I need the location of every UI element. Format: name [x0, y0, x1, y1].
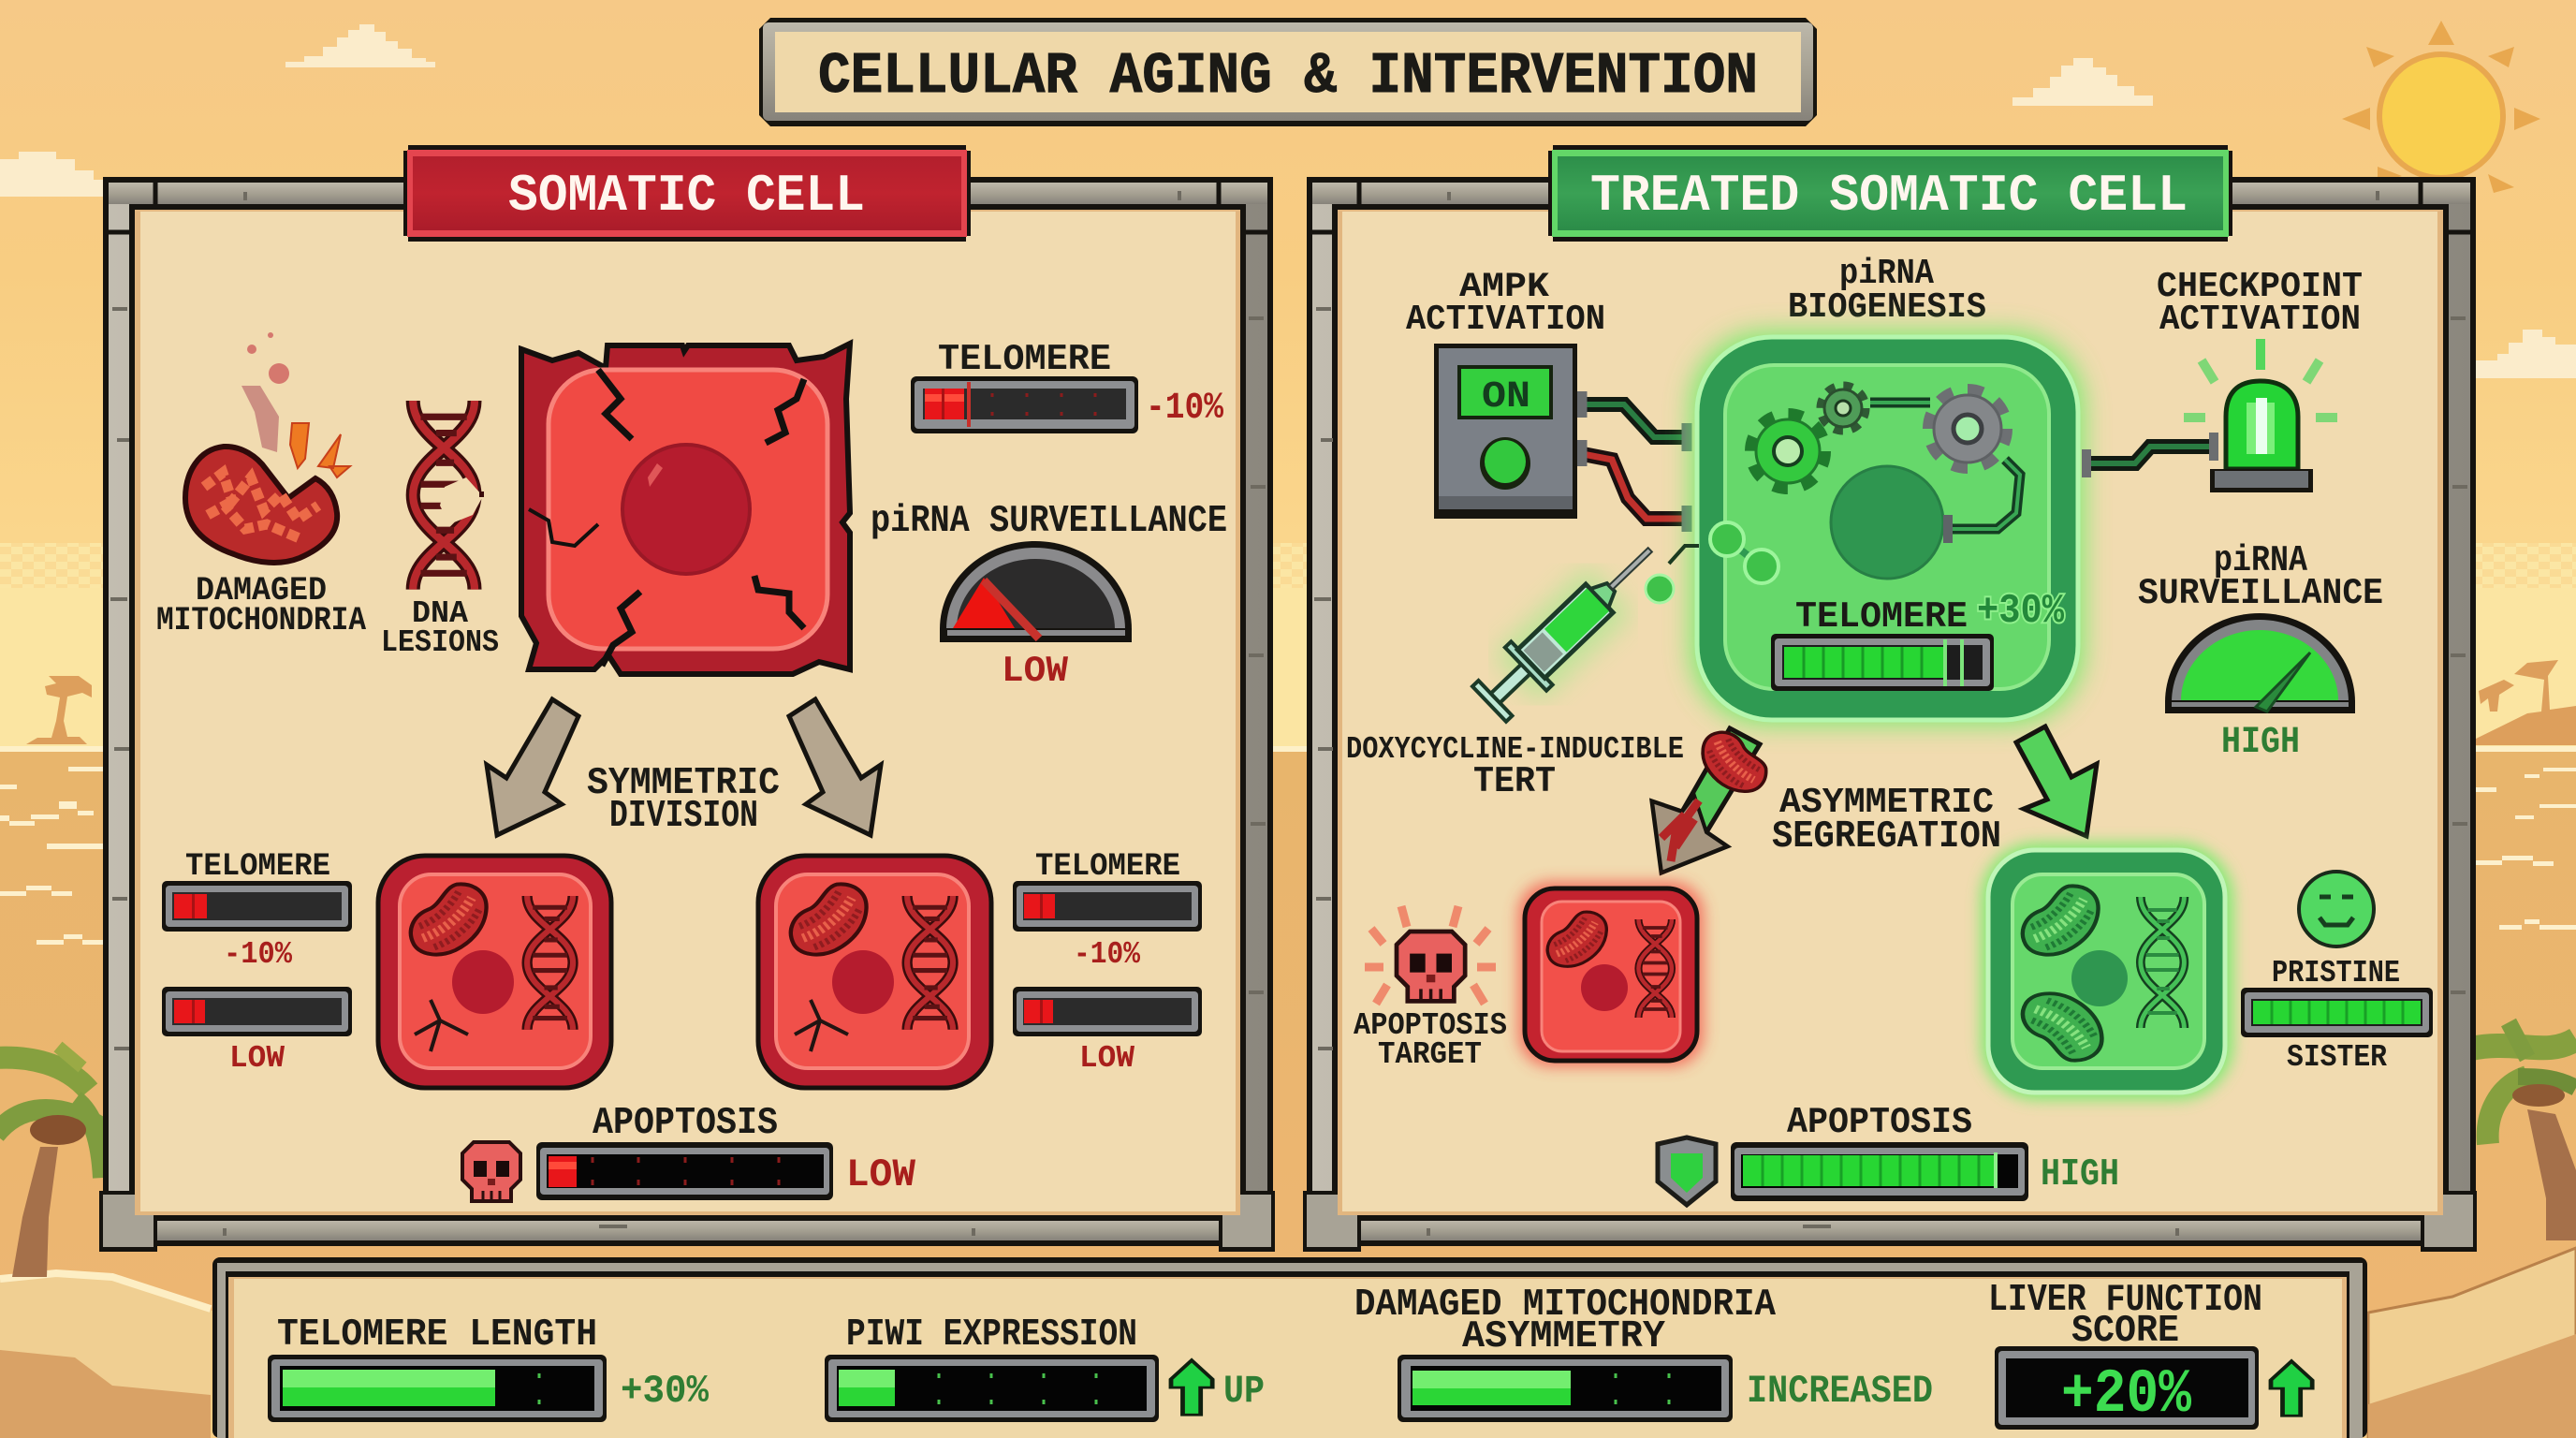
spray dashes	[1669, 546, 1699, 564]
metric: damaged mitochondria asymmetry	[1354, 1284, 1933, 1422]
darker sand left	[0, 1350, 211, 1438]
icon: skull	[462, 1142, 520, 1201]
left daughter stats: LOW	[229, 1041, 285, 1076]
header: treated somatic cell: TREATED SOMATIC CELL	[1590, 166, 2188, 226]
metric: telomere length: TELOMERE LENGTH	[277, 1313, 597, 1357]
icon: skull target with rays	[1365, 906, 1496, 1004]
panel frame	[1303, 177, 2477, 1252]
pristine bar	[2241, 988, 2433, 1037]
header: somatic cell	[403, 145, 971, 242]
label: damaged mitochondria	[156, 572, 366, 639]
label: DNA lesions	[381, 596, 499, 660]
label: damaged mitochondria: MITOCHONDRIA	[156, 602, 366, 639]
arrow: left daughter	[487, 699, 578, 835]
telomere minus 10 percent: -10%	[1146, 388, 1224, 430]
syringe glow	[1516, 590, 1610, 679]
telomere label in cell: TELOMERE	[1795, 596, 1968, 638]
treated cell glow	[1690, 331, 2084, 725]
label: low: LOW	[1002, 651, 1069, 692]
label: AMPK activation: ACTIVATION	[1406, 300, 1605, 340]
label: checkpoint activation: ACTIVATION	[2159, 300, 2361, 340]
label: apoptosis target: APOPTOSIS	[1354, 1008, 1507, 1043]
label: apoptosis target	[1354, 1008, 1507, 1072]
right daughter stats: -10%	[1074, 937, 1140, 972]
wires: switch to cell	[1582, 391, 1688, 532]
icon: AMPK on switch: ON	[1482, 376, 1530, 418]
gauge: piRNA surveillance high	[2165, 613, 2355, 713]
label: piRNA biogenesis	[1788, 254, 1986, 328]
gear: small	[1822, 388, 1864, 429]
left daughter cell	[378, 856, 611, 1088]
header: somatic cell: SOMATIC CELL	[508, 166, 865, 226]
label: symmetric division: SYMMETRIC	[587, 762, 780, 805]
apoptosis bar low	[536, 1142, 833, 1200]
label: symmetric division: DIVISION	[609, 795, 758, 838]
nucleus	[1831, 466, 1943, 579]
wire to beacon	[2086, 433, 2214, 477]
right daughter cell	[758, 856, 991, 1088]
nucleus	[622, 445, 750, 574]
metric: liver function score: LIVER FUNCTION	[1988, 1279, 2262, 1322]
apoptosis bar high	[1731, 1142, 2028, 1201]
label: piRNA surveillance	[2138, 540, 2383, 614]
label: apoptosis high: HIGH	[2041, 1153, 2119, 1196]
gear: green	[1754, 418, 1822, 485]
label: DNA lesions: DNA	[412, 596, 468, 631]
metric: liver function score: +20%	[2061, 1359, 2191, 1430]
metric: damaged mitochondria asymmetry: ASYMMETRY	[1462, 1315, 1665, 1358]
cloud 1	[285, 24, 435, 67]
telomere bar in cell	[1771, 634, 1994, 691]
apoptotic daughter cell	[1525, 888, 1697, 1061]
label: sister: SISTER	[2287, 1040, 2387, 1075]
panel: treated somatic cell	[1303, 145, 2477, 1252]
right island with palms	[2474, 660, 2576, 745]
label: asymmetric segregation: ASYMMETRIC	[1779, 783, 1994, 823]
pristine daughter cell	[1988, 850, 2225, 1093]
panel frame	[99, 177, 1275, 1252]
red cell glow	[1518, 882, 1704, 1066]
label: apoptosis: APOPTOSIS	[593, 1102, 778, 1145]
label: piRNA surveillance: SURVEILLANCE	[2138, 573, 2383, 614]
molecules	[1710, 522, 1778, 583]
left island with palm	[26, 676, 92, 744]
label: doxycycline-inducible TERT	[1346, 732, 1684, 802]
icon: damaged mitochondrion	[185, 332, 350, 563]
label: symmetric division	[587, 762, 780, 838]
label: AMPK activation	[1406, 268, 1605, 340]
icon: syringe	[1469, 528, 1671, 726]
label: damaged mitochondria: DAMAGED	[196, 572, 327, 609]
left daughter stats: TELOMERE	[185, 849, 330, 885]
sun	[2342, 21, 2540, 193]
left palm tree	[0, 1047, 103, 1277]
label: piRNA surveillance: piRNA SURVEILLANCE	[871, 500, 1227, 543]
metric: piwi expression: PIWI EXPRESSION	[846, 1313, 1137, 1357]
label: high: HIGH	[2221, 722, 2300, 764]
title text: CELLULAR AGING & INTERVENTION	[818, 43, 1758, 110]
label: asymmetric segregation	[1772, 783, 2001, 858]
metric: telomere length: +30%	[621, 1369, 710, 1414]
right daughter stats: LOW	[1079, 1041, 1134, 1076]
icon: AMPK on switch	[1434, 344, 1577, 519]
metric: damaged mitochondria asymmetry: INCREASED	[1747, 1369, 1933, 1414]
metric: piwi expression	[825, 1313, 1265, 1422]
sand edge left	[0, 1273, 211, 1309]
cloud 4	[2473, 330, 2576, 378]
label: DNA lesions: LESIONS	[381, 625, 499, 660]
metric: piwi expression: UP	[1223, 1369, 1265, 1414]
left daughter stats: -10%	[224, 937, 292, 972]
right daughter stats: TELOMERE	[1035, 849, 1180, 885]
label: doxycycline-inducible TERT: TERT	[1473, 761, 1556, 802]
label: apoptosis: APOPTOSIS	[1787, 1102, 1972, 1143]
metric: damaged mitochondria asymmetry: DAMAGED MITOCHONDRIA	[1354, 1284, 1776, 1327]
gear wires	[1870, 403, 2020, 529]
arrow: to pristine sister	[2016, 726, 2097, 836]
label: checkpoint activation: CHECKPOINT	[2157, 267, 2363, 307]
metric: telomere length	[268, 1313, 710, 1422]
label: doxycycline-inducible TERT: DOXYCYCLINE-INDUCIBLE	[1346, 732, 1684, 767]
summary frame	[212, 1257, 2367, 1438]
header: treated somatic cell	[1548, 145, 2232, 242]
plus 30 percent: +30%	[1977, 588, 2065, 635]
left daughter stats	[162, 849, 352, 1076]
big damaged somatic cell	[521, 344, 850, 674]
metric: liver function score: SCORE	[2071, 1310, 2179, 1353]
right palm tree	[2471, 1022, 2576, 1240]
label: AMPK activation: AMPK	[1459, 268, 1550, 307]
panel: somatic cell	[99, 145, 1275, 1252]
arrow: damaged mitochondria to apoptosis	[1652, 728, 1766, 873]
icon: checkpoint beacon	[2184, 339, 2337, 492]
cloud 2	[2012, 58, 2153, 106]
label: checkpoint activation	[2157, 267, 2363, 340]
sand right side	[2368, 1248, 2576, 1438]
big treated cell	[1697, 337, 2078, 720]
icon: shield	[1658, 1137, 1716, 1205]
darker sand right	[2368, 1334, 2576, 1438]
label: asymmetric segregation: SEGREGATION	[1772, 815, 2001, 858]
molecule drop	[1646, 575, 1674, 603]
label: pristine: PRISTINE	[2272, 956, 2400, 990]
panel: summary metrics	[212, 1257, 2367, 1438]
label: piRNA biogenesis: piRNA	[1839, 254, 1934, 294]
metric: liver function score	[1988, 1279, 2312, 1430]
label: piRNA biogenesis: BIOGENESIS	[1788, 287, 1986, 328]
title plate	[759, 18, 1817, 126]
right daughter stats	[1013, 849, 1202, 1076]
cloud 3	[0, 152, 131, 197]
icon: DNA with lesions	[413, 401, 484, 590]
arrow: right daughter	[789, 699, 881, 835]
gauge: piRNA surveillance low	[940, 541, 1132, 642]
label: piRNA surveillance: piRNA	[2214, 540, 2307, 581]
label: apoptosis target: TARGET	[1378, 1037, 1482, 1072]
telomere label: TELOMERE	[938, 339, 1111, 380]
green cell glow	[1981, 843, 2233, 1100]
gear: grey	[1932, 393, 2003, 464]
telomere bar	[911, 376, 1138, 433]
icon: smile	[2299, 872, 2374, 946]
label: apoptosis low: LOW	[846, 1152, 916, 1197]
